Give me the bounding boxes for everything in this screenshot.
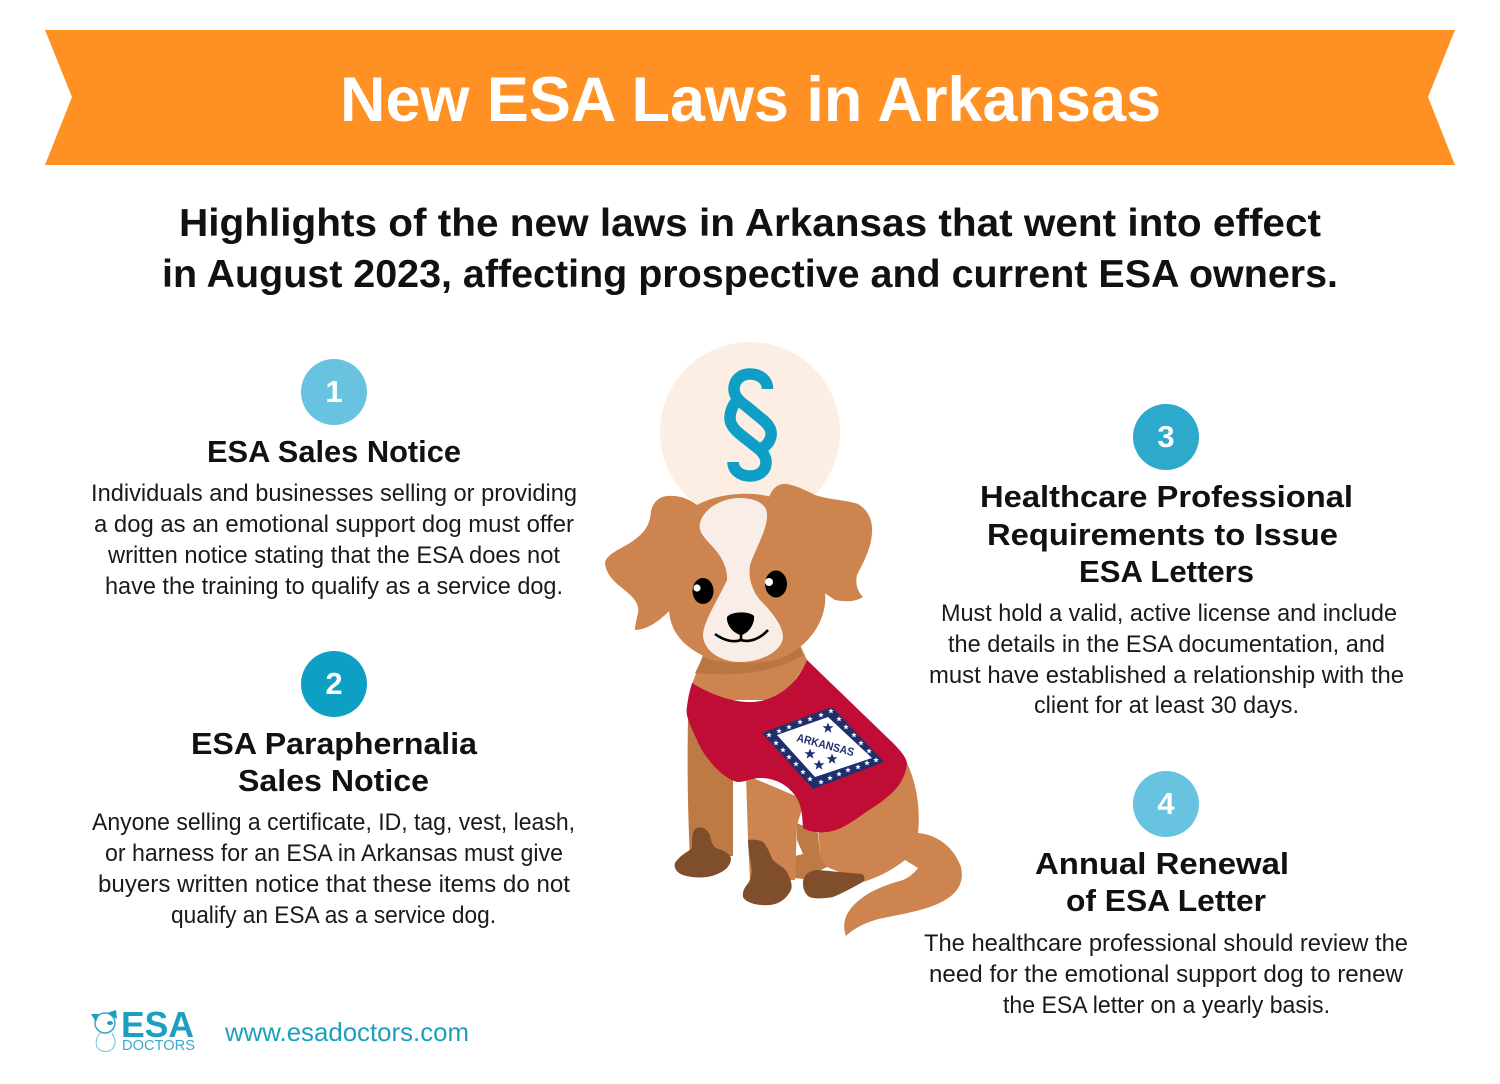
body text 2: Anyone selling a certificate, ID, tag, vest, leash,: [92, 809, 575, 836]
heading 2: Sales Notice: [238, 763, 429, 798]
illustration: dog in Arkansas vest: [605, 484, 962, 936]
heading 4: Annual Renewal: [1035, 846, 1289, 881]
number badge 1: 1: [325, 374, 343, 409]
number badge 1: [301, 359, 367, 425]
title banner: [45, 30, 1455, 165]
vest: [687, 660, 907, 832]
nose and mouth: [715, 612, 768, 641]
body text 1: a dog as an emotional support dog must offer: [94, 511, 574, 538]
head: [669, 494, 825, 663]
heading 3: Healthcare Professional: [980, 479, 1353, 514]
subtitle: Highlights of the new laws in Arkansas that went into effect: [179, 202, 1321, 245]
right ear: [760, 484, 872, 601]
dog tail and body: [800, 700, 962, 936]
body text 4: need for the emotional support dog to renew: [929, 961, 1404, 988]
body text 1: [91, 480, 577, 600]
logo: ESA Doctors: DOCTORS: [122, 1037, 195, 1054]
website url: www.esadoctors.com: [224, 1017, 469, 1047]
heading 1: ESA Sales Notice: [207, 434, 461, 469]
heading 4: [1035, 846, 1289, 918]
paw back: [803, 870, 865, 898]
white blaze and muzzle: [700, 498, 783, 662]
front right leg: [746, 775, 805, 880]
panel: item 4 Annual Renewal of ESA Letter: [924, 771, 1408, 1019]
number badge 3: [1133, 404, 1199, 470]
body text 2: [92, 809, 575, 929]
heading 2: [191, 726, 478, 798]
subtitle: [162, 202, 1338, 296]
subtitle: in August 2023, affecting prospective and current ESA owners.: [162, 253, 1338, 296]
heading 2: ESA Paraphernalia: [191, 726, 478, 761]
back leg: [795, 823, 827, 879]
flag patch: ARKANSAS: [795, 732, 856, 759]
heading 3: [980, 479, 1353, 589]
paw left: [675, 827, 731, 877]
body text 4: [924, 930, 1408, 1019]
panel: item 1 ESA Sales Notice: [91, 359, 577, 600]
collar shade: [695, 647, 803, 674]
panel: item 3 Healthcare Professional Requirements: [929, 404, 1404, 719]
heading 3: Requirements to Issue: [987, 517, 1338, 552]
panel: item 2 ESA Paraphernalia Sales Notice: [92, 651, 575, 929]
number badge 2: [301, 651, 367, 717]
icon: section sign in circle: [660, 342, 840, 522]
logo: ESA Doctors: [91, 1004, 195, 1054]
body text 4: the ESA letter on a yearly basis.: [1003, 992, 1330, 1019]
number badge 4: [1133, 771, 1199, 837]
heading 4: of ESA Letter: [1066, 883, 1266, 918]
body text 2: or harness for an ESA in Arkansas must give: [105, 840, 563, 867]
body text 4: The healthcare professional should review the: [924, 930, 1408, 957]
body text 3: client for at least 30 days.: [1034, 692, 1299, 719]
body text 3: Must hold a valid, active license and include: [941, 600, 1397, 627]
body text 1: have the training to qualify as a service dog.: [105, 573, 563, 600]
body text 1: Individuals and businesses selling or providing: [91, 480, 577, 507]
paw right: [743, 840, 792, 905]
body text 1: written notice stating that the ESA does not: [107, 542, 560, 569]
neck: [692, 645, 808, 700]
logo: ESA Doctors: ESA: [121, 1004, 194, 1045]
body text 2: qualify an ESA as a service dog.: [171, 902, 496, 929]
body text 3: [929, 600, 1404, 719]
body text 3: the details in the ESA documentation, and: [948, 631, 1385, 658]
body text 2: buyers written notice that these items do not: [98, 871, 570, 898]
front left leg: [688, 720, 733, 856]
number badge 3: 3: [1157, 419, 1175, 454]
title banner: New ESA Laws in Arkansas: [340, 65, 1161, 135]
flag patch: [762, 707, 884, 789]
body text 3: must have established a relationship with the: [929, 662, 1404, 689]
number badge 2: 2: [325, 666, 343, 701]
left ear: [605, 496, 700, 630]
number badge 4: 4: [1157, 786, 1175, 821]
logo dog icon: [91, 1010, 117, 1051]
heading 3: ESA Letters: [1079, 554, 1254, 589]
eyes: [692, 570, 787, 604]
